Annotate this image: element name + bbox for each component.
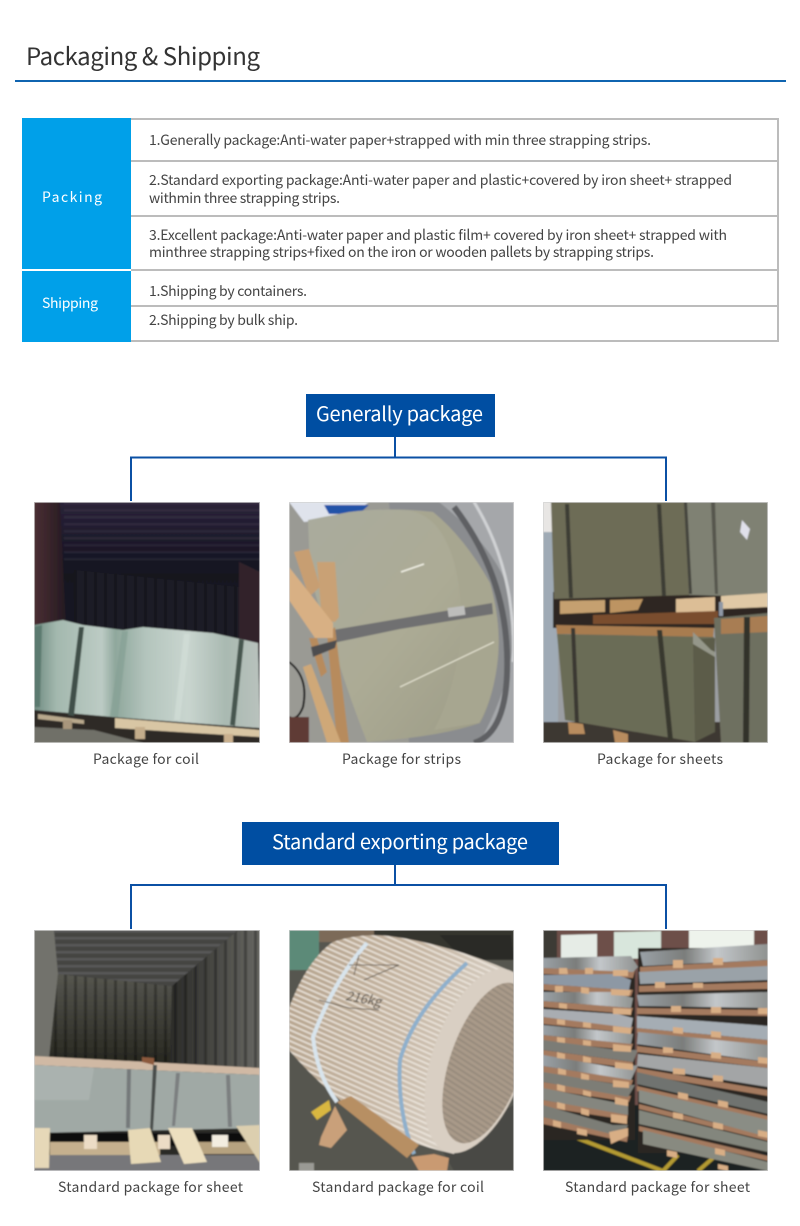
packing rows: 3.Excellent package:Anti-water paper and plastic film+ covered by iron sheet+ strapped with	[149, 225, 727, 245]
packing rows: minthree strapping strips+fixed on the iron or wooden pallets by strapping strips.	[149, 242, 654, 262]
panel: packing and shipping table	[22, 118, 779, 342]
heading: generally package: Generally package	[316, 398, 483, 427]
photo: standard package for sheet, container	[34, 930, 260, 1171]
caption: package for strips: Package for strips	[342, 749, 461, 769]
shipping rows: 2.Shipping by bulk ship.	[149, 310, 298, 330]
connector: generally package	[131, 437, 666, 501]
packing label: Packing	[42, 187, 102, 207]
heading: standard exporting package	[242, 822, 559, 865]
shipping rows: 1.Shipping by containers.	[149, 281, 307, 301]
right stack boards	[637, 960, 768, 1161]
heading: standard exporting package: Standard exporting package	[272, 826, 528, 855]
caption: standard package for coil: Standard package for coil	[312, 1177, 484, 1197]
packing rows: 1.Generally package:Anti-water paper+strapped with min three strapping strips.	[149, 130, 651, 150]
photo: standard package for sheet, stacks	[543, 930, 768, 1171]
left stack rows	[543, 956, 638, 1144]
caption: standard package for sheet, stacks: Standard package for sheet	[565, 1177, 751, 1197]
photo: package for sheets	[543, 502, 768, 743]
caption: standard package for sheet, container: Standard package for sheet	[58, 1177, 244, 1197]
right stack rows	[637, 944, 768, 1171]
packing rows: 2.Standard exporting package:Anti-water paper and plastic+covered by iron sheet+ strapped	[149, 170, 732, 190]
photo: package for coil	[34, 502, 260, 743]
connector: standard exporting package	[131, 865, 666, 929]
caption: package for sheets: Package for sheets	[597, 749, 723, 769]
photo: standard package for coil	[289, 930, 514, 1171]
packing rows	[149, 130, 732, 262]
caption: package for coil: Package for coil	[93, 749, 199, 769]
photo: standard package for coil: 216kg	[344, 985, 385, 1010]
photo: package for strips	[289, 502, 514, 743]
packing rows: withmin three strapping strips.	[149, 188, 340, 208]
shipping rows	[149, 281, 307, 330]
shipping label: Shipping	[42, 293, 98, 313]
left stack boards	[543, 968, 635, 1142]
heading: generally package	[306, 394, 495, 437]
shipping label	[22, 271, 131, 342]
title: Packaging & Shipping	[26, 37, 260, 72]
packing label	[22, 118, 131, 269]
